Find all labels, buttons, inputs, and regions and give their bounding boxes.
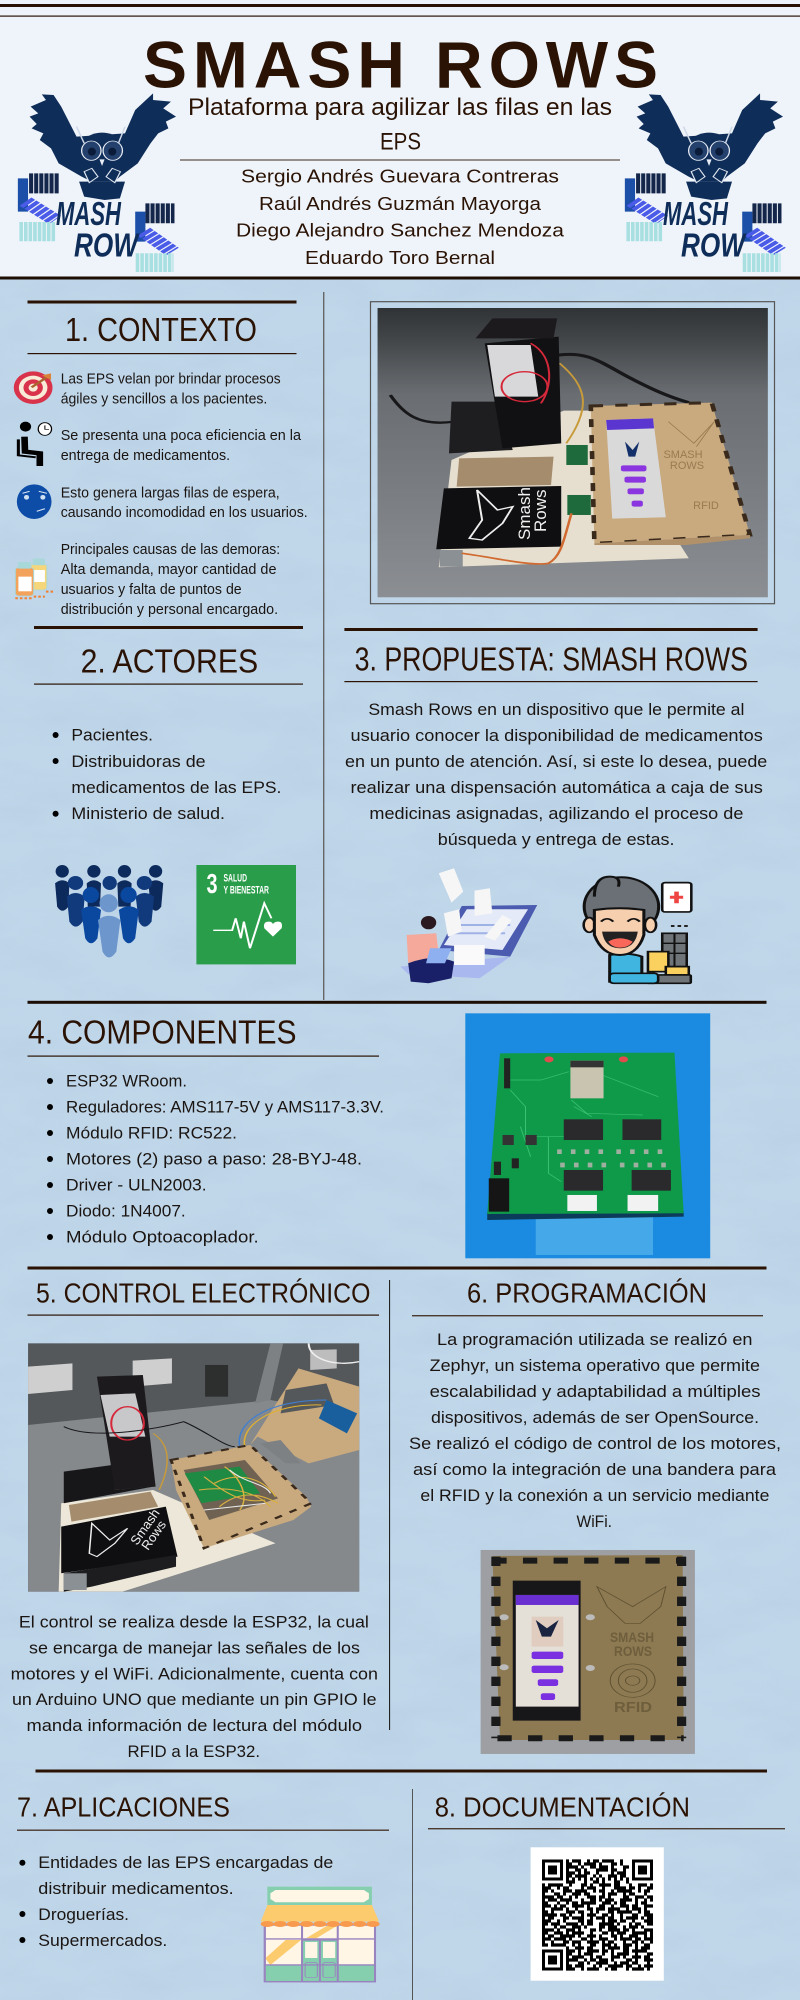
list: componentes: Módulo RFID: RC522. xyxy=(66,1124,237,1143)
icon: target xyxy=(14,371,53,404)
heading: componentes: 4. COMPONENTES xyxy=(28,1013,296,1050)
list: actores: medicamentos de las EPS. xyxy=(71,778,281,797)
text: poca eficiencia: Se presenta una poca eficiencia en la xyxy=(61,427,302,444)
photo: box lid with phone app: RFID xyxy=(614,1699,652,1716)
list: componentes xyxy=(47,1072,384,1247)
text: programacion: dispositivos, además de ser OpenSource. xyxy=(431,1408,759,1427)
text: programacion: Zephyr, un sistema operativo que permite xyxy=(430,1356,760,1375)
heading: control electronico: 5. CONTROL ELECTRÓNICO xyxy=(36,1278,370,1309)
panel: documentacion xyxy=(428,1792,785,1981)
text: eps velan xyxy=(61,370,281,407)
icon: sdg 3 salud y bienestar xyxy=(196,865,296,964)
panel: contexto xyxy=(14,300,308,618)
text: programacion xyxy=(409,1330,781,1531)
text: propuesta: en un punto de atención. Así, si este lo desea, puede xyxy=(345,752,767,771)
logo left: MASH xyxy=(56,195,122,232)
text: programacion: escalabilidad y adaptabilidad a múltiples xyxy=(430,1382,761,1401)
heading: contexto: 1. CONTEXTO xyxy=(65,311,257,348)
text: control xyxy=(11,1612,378,1761)
panel: propuesta xyxy=(344,628,767,983)
text: programacion: La programación utilizada se realizó en xyxy=(437,1330,752,1349)
subtitle: Plataforma para agilizar las filas en las xyxy=(188,94,612,121)
authors: Sergio Andrés Guevara Contreras xyxy=(241,167,559,187)
list: componentes: ESP32 WRoom. xyxy=(66,1072,187,1091)
list: componentes: Reguladores: AMS117-5V y AMS117-3.3V. xyxy=(66,1098,384,1117)
authors: Raúl Andrés Guzmán Mayorga xyxy=(259,194,542,214)
text: programacion: el RFID y la conexión a un servicio mediante xyxy=(420,1486,769,1505)
heading: documentacion: 8. DOCUMENTACIÓN xyxy=(435,1792,690,1823)
photo: dispenser prototype: RFID xyxy=(693,500,719,512)
list: actores xyxy=(53,726,281,823)
text: control: manda información de lectura del módulo xyxy=(26,1716,362,1735)
logo right: ROW xyxy=(681,227,747,264)
list: actores: Distribuidoras de xyxy=(71,752,206,771)
text: causas: usuarios y falta de puntos de xyxy=(61,581,242,598)
text: eps velan: Las EPS velan por brindar procesos xyxy=(61,370,281,387)
text: causas: distribución y personal encargado. xyxy=(61,601,278,618)
text: propuesta: realizar una dispensación automática a caja de sus xyxy=(350,778,763,797)
list: aplicaciones: Droguerías. xyxy=(38,1905,129,1924)
text: largas filas: Esto genera largas filas de espera, xyxy=(61,484,280,501)
text: propuesta: Smash Rows en un dispositivo que le permite al xyxy=(368,700,744,719)
text: propuesta: usuario conocer la disponibilidad de medicamentos xyxy=(350,726,763,745)
logo right xyxy=(626,93,783,264)
photo: box lid with phone app: ROWS xyxy=(614,1643,652,1659)
photo: open box wiring: Smash xyxy=(127,1506,163,1548)
panel: programacion xyxy=(409,1278,781,1754)
text: largas filas: causando incomodidad en los usuarios. xyxy=(61,504,308,521)
text: control: se encarga de manejar las señales de los xyxy=(29,1638,360,1657)
list: aplicaciones: Supermercados. xyxy=(38,1931,167,1950)
list: actores: Pacientes. xyxy=(71,726,153,745)
text: control: El control se realiza desde la ESP32, la cual xyxy=(19,1612,369,1631)
text: propuesta: medicinas asignadas, agilizando el proceso de xyxy=(369,804,743,823)
photo: box lid with phone app: SMASH xyxy=(610,1629,654,1645)
text: propuesta xyxy=(345,700,767,849)
photo: pcb xyxy=(465,1013,710,1258)
authors xyxy=(236,167,565,268)
text: programacion: WiFi. xyxy=(576,1512,612,1531)
photo: dispenser prototype: ROWS xyxy=(670,460,704,472)
photo: open box wiring: Rows xyxy=(138,1517,169,1553)
icon: medicine bottles xyxy=(15,559,54,598)
heading: actores: 2. ACTORES xyxy=(81,643,258,680)
list: componentes: Motores (2) paso a paso: 28-BYJ-48. xyxy=(66,1150,362,1169)
icon: group of people xyxy=(55,865,163,957)
photo: open box wiring xyxy=(28,1343,359,1592)
text: propuesta: búsqueda y entrega de estas. xyxy=(438,830,674,849)
photo: dispenser prototype: Rows xyxy=(531,489,550,532)
logo right: MASH xyxy=(663,195,729,232)
text: eps velan: ágiles y sencillos a los pacientes. xyxy=(61,390,267,407)
header band xyxy=(0,0,800,280)
logo left xyxy=(19,93,176,264)
text: poca eficiencia: entrega de medicamentos. xyxy=(61,447,230,464)
photo: dispenser prototype: SMASH xyxy=(663,449,703,461)
text: programacion: así como la integración de una bandera para xyxy=(413,1460,777,1479)
panel: aplicaciones xyxy=(17,1792,389,1982)
illustration: happy character with pharmacy items xyxy=(584,877,691,983)
icon: storefront xyxy=(261,1887,380,1982)
authors: Diego Alejandro Sanchez Mendoza xyxy=(236,221,565,241)
list: actores: Ministerio de salud. xyxy=(71,804,225,823)
text: control: RFID a la ESP32. xyxy=(128,1742,260,1761)
heading: aplicaciones: 7. APLICACIONES xyxy=(17,1792,230,1823)
text: control: un Arduino UNO que mediante un pin GPIO le xyxy=(12,1690,376,1709)
text: causas: Alta demanda, mayor cantidad de xyxy=(61,561,277,578)
text: poca eficiencia xyxy=(61,427,302,464)
list: componentes: Driver - ULN2003. xyxy=(66,1176,207,1195)
photo: dispenser prototype: Smash xyxy=(515,487,534,540)
panel: control electronico xyxy=(11,1278,379,1761)
qr code xyxy=(531,1847,664,1981)
photo: box lid with phone app xyxy=(481,1550,695,1754)
heading: programacion: 6. PROGRAMACIÓN xyxy=(467,1278,707,1309)
panel: componentes xyxy=(28,1013,710,1258)
subtitle xyxy=(188,94,612,155)
icon: seated person with clock xyxy=(18,422,52,466)
text: causas: Principales causas de las demoras: xyxy=(61,541,280,558)
icon: sdg 3 salud y bienestar: SALUD xyxy=(224,873,247,885)
subtitle: EPS xyxy=(380,128,421,155)
text: causas xyxy=(61,541,280,618)
icon: sad face xyxy=(17,484,52,519)
text: largas filas xyxy=(61,484,308,521)
text: control: motores y el WiFi. Adicionalmente, cuenta con xyxy=(11,1664,378,1683)
illustration: person with laptop and documents xyxy=(401,868,537,983)
icon: sdg 3 salud y bienestar: 3 xyxy=(206,868,218,899)
title: SMASH ROWS xyxy=(143,28,658,102)
list: componentes: Diodo: 1N4007. xyxy=(66,1202,186,1221)
list: aplicaciones xyxy=(19,1853,333,1950)
list: componentes: Módulo Optoacoplador. xyxy=(66,1228,259,1247)
text: programacion: Se realizó el código de control de los motores, xyxy=(409,1434,781,1453)
authors: Eduardo Toro Bernal xyxy=(305,248,495,268)
icon: sdg 3 salud y bienestar: Y BIENESTAR xyxy=(224,884,269,896)
panel: actores xyxy=(34,626,303,964)
photo: dispenser prototype xyxy=(370,302,774,604)
list: aplicaciones: Entidades de las EPS encargadas de xyxy=(38,1853,333,1872)
list: aplicaciones: distribuir medicamentos. xyxy=(38,1879,234,1898)
logo left: ROW xyxy=(74,227,140,264)
